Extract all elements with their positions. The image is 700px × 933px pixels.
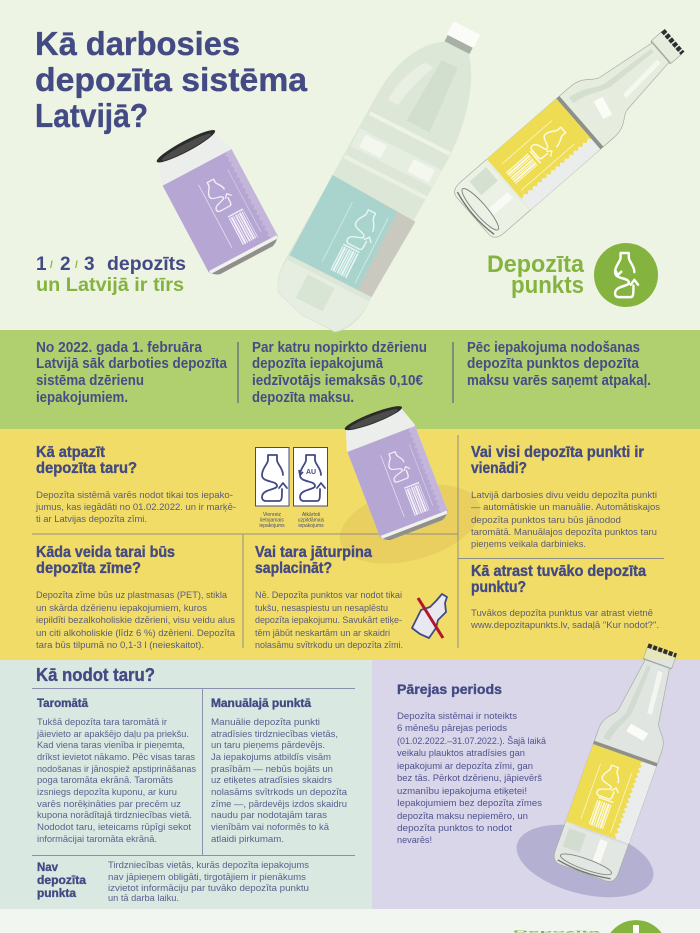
- column: manual point: atradīsies tirdzniecības vietās,: [211, 728, 338, 739]
- fact: deposit price: depozīta maksu.: [252, 390, 354, 406]
- column: reverse vending machine: kupona norādītajā tirdzniecības vietā.: [37, 809, 192, 820]
- fact: deposit price: iedzīvotājs iemaksās 0,10€: [252, 373, 423, 389]
- body text: — automātiskie un manuālie. Automātiskajos: [471, 501, 660, 512]
- slogan: /: [75, 260, 78, 271]
- block: no deposit point: depozīta: [37, 875, 87, 887]
- body text: [255, 589, 403, 650]
- illustration: glass bottle: [451, 17, 695, 241]
- heading: Kā atpazīt: [36, 444, 105, 461]
- body text: Tuvākos depozīta punktus var atrast vietnē: [471, 607, 653, 618]
- heading: Kā nodot taru?: [36, 665, 155, 685]
- column: reverse vending machine: Tukšā depozīta tara taromātā ir: [37, 716, 167, 727]
- logo: Depozīta punkts: punkts: [511, 272, 584, 299]
- heading: [471, 563, 646, 596]
- logo: Depozīta punkts, footer: [513, 920, 662, 933]
- slogan: 1: [36, 254, 47, 275]
- column: manual point: Manuālie depozīta punkti: [211, 716, 320, 727]
- body text: Depozīta sistēmai ir noteikts: [397, 711, 517, 722]
- body text: Depozīta sistēmā varēs nodot tikai tos iepako-: [36, 489, 233, 500]
- heading: [471, 444, 644, 477]
- fact: refund: maksu varēs saņemt atpakaļ.: [467, 373, 651, 389]
- section: which packaging: [36, 544, 236, 650]
- body text: nevarēs!: [397, 835, 432, 846]
- body text: depozīta punktos to nodot: [397, 823, 512, 834]
- column: manual point: zīme —, pārdevējs izdos skaidru: [211, 798, 347, 809]
- panel: key facts: [36, 340, 651, 406]
- slogan: [36, 254, 186, 296]
- column: reverse vending machine: izsniegs depozīta kuponu, ar kuru: [37, 786, 177, 797]
- fact: deposit price: depozīta iepakojumā: [252, 356, 384, 372]
- block: no deposit point: Nav: [37, 862, 59, 874]
- panel: transition period: [397, 639, 694, 910]
- heading: depozīta taru?: [36, 460, 137, 477]
- fact: deposit price: [252, 340, 427, 406]
- icon: single-use deposit mark: [256, 448, 289, 529]
- body text: depozīta punktos taru būs jānodod: [471, 514, 621, 525]
- body text: iepakojumi ar depozīta zīmi, gan: [397, 761, 533, 772]
- fact: deposit price: Par katru nopirkto dzērienu: [252, 340, 427, 356]
- heading: depozīta zīme?: [36, 560, 141, 577]
- body text: jumus, kas iegādāti no 01.02.2022. un ir marķē-: [35, 501, 236, 512]
- section: recognise deposit packaging: [35, 444, 236, 524]
- icon: refillable deposit mark: Atkārtoti: [302, 512, 320, 518]
- body text: depozīta maksu nepiemēro, un: [397, 811, 528, 822]
- body text: un citi alkoholiskie (līdz 6 %) dzērieni. Depozīta: [36, 627, 236, 638]
- section: flatten packaging: [255, 544, 403, 650]
- heading: Vai tara jāturpina: [255, 544, 372, 561]
- block: no deposit point: punkta: [37, 888, 77, 900]
- body text: Depozīta zīme būs uz plastmasas (PET), stikla: [36, 589, 228, 600]
- body text: bez tās. Pērkot dzērienu, jāpievērš: [397, 773, 542, 784]
- slogan: un Latvijā ir tīrs: [36, 275, 184, 296]
- panel: how to return: [32, 665, 355, 903]
- body text: [35, 489, 236, 524]
- heading: Vai visi depozīta punkti ir: [471, 444, 644, 461]
- column: manual point: prasībām — nebūs bojāts un: [211, 763, 333, 774]
- title: Kā darbosies: [35, 25, 240, 62]
- body text: tara būs tilpumā no 0,1-3 l (neieskaitot).: [36, 639, 204, 650]
- icon: refillable deposit mark: uzpildāmais: [298, 518, 325, 524]
- illustration: can on yellow panel: [338, 400, 450, 543]
- column: manual point: vienībām vai noformēs to kā: [211, 821, 330, 832]
- heading: [255, 544, 372, 577]
- heading: vienādi?: [471, 460, 527, 477]
- column: manual point: Manuālajā punktā: [211, 698, 312, 710]
- body text: [397, 711, 547, 846]
- section: find nearest point: [470, 563, 659, 630]
- fact: start date: Latvijā sāk darboties depozīta: [36, 356, 228, 372]
- fact: start date: iepakojumiem.: [36, 390, 128, 406]
- column: reverse vending machine: Kad viena taras vienība ir pieņemta,: [37, 739, 185, 750]
- can shadow: [331, 471, 489, 577]
- title: depozīta sistēma: [35, 61, 308, 98]
- body text: nolasāmu svītrkodu un depozīta zīmi.: [255, 639, 403, 650]
- fact: refund: [467, 340, 651, 389]
- column: reverse vending machine: informācijai taromāta ekrānā.: [37, 833, 157, 844]
- fact: start date: sistēma dzērienu: [36, 373, 144, 389]
- title: Latvijā?: [35, 97, 148, 134]
- fact: refund: depozīta punktos depozīta: [467, 356, 640, 372]
- column: reverse vending machine: jāievieto ar apakšējo daļu pa priekšu.: [36, 728, 189, 739]
- logo: Depozīta punkts: [487, 243, 658, 307]
- block: no deposit point: nav jāpieņem obligāti, tirgotājiem ir pienākums: [108, 871, 306, 882]
- fact: start date: [36, 340, 228, 406]
- icon: refillable deposit mark: iepakojums: [298, 523, 324, 529]
- slogan: 2: [60, 254, 71, 275]
- icon: refillable deposit mark: AU: [306, 469, 316, 476]
- body text: ti ar Latvijas depozīta zīmi.: [36, 513, 147, 524]
- slogan: depozīts: [107, 254, 186, 275]
- column: reverse vending machine: Taromātā: [37, 698, 89, 710]
- body text: tēm jābūt neskartām un ar skaidri: [255, 627, 390, 638]
- heading: Kā atrast tuvāko depozīta: [471, 563, 646, 580]
- column: manual point: [211, 698, 348, 844]
- body text: [471, 489, 660, 549]
- icon: crushed bottle crossed out: [412, 594, 447, 638]
- body text: (01.02.2022.–31.07.2022.). Šajā laikā: [397, 736, 547, 747]
- column: reverse vending machine: Nododot taru, ieteicams rūpīgi sekot: [37, 821, 191, 832]
- logo: Depozīta punkts: Depozīta: [487, 251, 585, 278]
- column: reverse vending machine: drīkst ievietot nākamo. Pēc visas taras: [37, 751, 195, 762]
- body text: tukšu, nesaspiestu un nesaplēstu: [255, 602, 388, 613]
- heading: Kāda veida tarai būs: [36, 544, 175, 561]
- block: no deposit point: [37, 859, 309, 903]
- body text: un skārda dzērienu iepakojumiem, kuros: [36, 602, 207, 613]
- body text: [470, 607, 659, 630]
- block: no deposit point: un tā darba laiku.: [108, 892, 179, 903]
- block: no deposit point: izvietot informāciju par tuvāko depozīta punktu: [108, 882, 309, 893]
- heading: [36, 544, 175, 577]
- icon: single-use deposit mark: lietojamais: [260, 518, 284, 524]
- column: manual point: nolasāms svītrkods un depozīta: [211, 786, 348, 797]
- fact: refund: Pēc iepakojuma nodošanas: [467, 340, 640, 356]
- title: [35, 25, 308, 134]
- section: are all points equal: [471, 444, 660, 549]
- block: no deposit point: Tirdzniecības vietās, kurās depozīta iepakojums: [108, 859, 309, 870]
- illustration: glass bottle: [551, 639, 694, 884]
- body text: pieņems veikala darbinieks.: [471, 538, 586, 549]
- column: manual point: uz etiķetes atradīsies skaidrs: [211, 774, 332, 785]
- icon: refillable deposit mark: [294, 448, 328, 529]
- column: manual point: un taru pieņems pārdevējs.: [211, 739, 325, 750]
- column: reverse vending machine: varēs norēķināties par precēm uz: [37, 798, 181, 809]
- illustration: PET bottle: [266, 2, 505, 342]
- bottle shadow: [509, 812, 661, 910]
- heading: [36, 444, 137, 477]
- body text: depozīta iepakojumu. Savukārt etiķe-: [255, 614, 402, 625]
- column: manual point: atlaidi pirkumam.: [211, 833, 284, 844]
- icon: single-use deposit mark: Vienreiz: [263, 512, 281, 518]
- body text: veikalu plauktos atradīsies gan: [397, 748, 525, 759]
- heading: punktu?: [471, 579, 526, 596]
- heading: saplacināt?: [255, 560, 332, 577]
- body text: [36, 589, 236, 650]
- column: manual point: naudu par nodotajām taras: [211, 809, 327, 820]
- body text: iepildīti bezalkoholiskie dzērieni, visu veidu alus: [36, 614, 235, 625]
- icon: single-use deposit mark: iepakojums: [259, 523, 285, 529]
- column: reverse vending machine: [36, 698, 196, 844]
- body text: Iepakojumiem bez depozīta zīmes: [397, 798, 542, 809]
- body text: Latvijā darbosies divu veidu depozīta punkti: [471, 489, 657, 500]
- slogan: /: [50, 260, 53, 271]
- body text: 6 mēnešu pārejas periods: [397, 723, 507, 734]
- body text: Nē. Depozīta punktos var nodot tikai: [255, 589, 402, 600]
- heading: Pārejas periods: [397, 681, 502, 697]
- body text: www.depozitapunkts.lv, sadaļā "Kur nodot?".: [470, 619, 659, 630]
- column: reverse vending machine: nodošanas ir jānospiež apstiprināšanas: [37, 763, 196, 774]
- column: reverse vending machine: poga taromāta ekrānā. Taromāts: [37, 774, 173, 785]
- illustration: can: [149, 123, 281, 278]
- fact: start date: No 2022. gada 1. februāra: [36, 340, 203, 356]
- slogan: 3: [84, 254, 95, 275]
- body text: uzmanību iepakojuma etiķetei!: [397, 786, 527, 797]
- column: manual point: Ja iepakojums atbildīs visām: [211, 751, 331, 762]
- body text: taromātā. Manuālajos depozīta punktos taru: [471, 526, 657, 537]
